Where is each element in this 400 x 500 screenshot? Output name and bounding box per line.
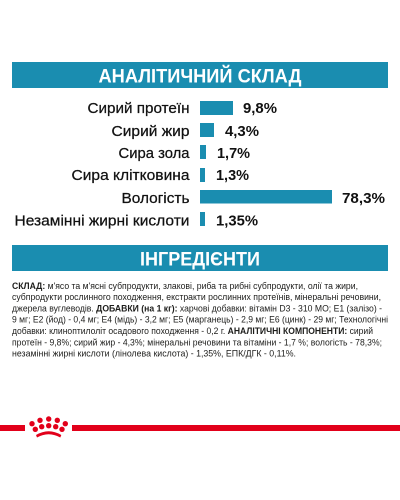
row: crude ash <box>118 145 250 162</box>
text block: ingredients list: незамінні жирні кислоти (лінолева кислота) - 1,35%, ЕПК/ДГК - 0,11%. <box>12 349 296 359</box>
row: essential fatty acids: 1,35% <box>216 212 258 230</box>
text block: ingredients list: субпродукти рослинного походження, екстракти рослинних протеїнів, мінеральні речовини, <box>12 292 381 302</box>
row: essential fatty acids <box>14 212 258 230</box>
text block: ingredients list: добавки: клиноптилоліт осадового походження - 0,2 г. АНАЛІТИЧНІ КОМПОНЕНТИ: сирий <box>12 326 373 336</box>
text block: ingredients list: СКЛАД: м'ясо та м'ясні субпродукти, злакові, риба та рибні субпродукти, олії та жири, <box>12 281 358 291</box>
row: crude ash: 1,7% <box>217 145 250 162</box>
row: crude fat <box>112 123 259 140</box>
row: crude fibre <box>72 167 249 184</box>
row: crude fibre: Сира клітковина <box>72 167 190 184</box>
footer band: red line <box>0 425 400 431</box>
row: crude protein: 9,8% <box>243 100 277 117</box>
bar chart: composition <box>14 100 385 230</box>
row: crude protein: Сирий протеїн <box>88 100 190 117</box>
row: crude fibre: 1,3% <box>216 167 249 184</box>
row: crude fat: 4,3% <box>225 123 259 140</box>
text block: ingredients list: 9 мг; Е2 (йод) - 0,4 мг; Е4 (мідь) - 3,2 мг; Е5 (марганець) - 2,9 мг; Е6 (цинк) - 29 мг; Технологічні <box>12 315 388 325</box>
icon: Royal Canin crown <box>29 416 68 438</box>
row: crude protein <box>88 100 277 117</box>
row: essential fatty acids: Незамінні жирні кислоти <box>14 212 189 230</box>
text block: ingredients list: протеїн - 9,8%; сирий жир - 4,3%; мінеральні речовини та вітаміни - 1,7 %; вологість - 78,3%; <box>12 337 382 347</box>
row: moisture: Вологість <box>122 190 190 207</box>
row: moisture <box>122 190 385 207</box>
row: crude fat: Сирий жир <box>112 123 190 140</box>
panel: analytical composition heading <box>12 62 388 88</box>
text block: ingredients list: джерела вуглеводів. ДОБАВКИ (на 1 кг): харчові добавки: вітамін D3 - 310 МО; Е1 (залізо) - <box>12 303 382 313</box>
panel: ingredients heading <box>12 245 388 271</box>
row: crude ash: Сира зола <box>118 145 190 162</box>
text block: ingredients list <box>12 281 388 359</box>
row: moisture: 78,3% <box>342 190 385 207</box>
panel: ingredients heading: ІНГРЕДІЄНТИ <box>140 248 260 270</box>
panel: analytical composition heading: АНАЛІТИЧНИЙ СКЛАД <box>98 64 302 88</box>
